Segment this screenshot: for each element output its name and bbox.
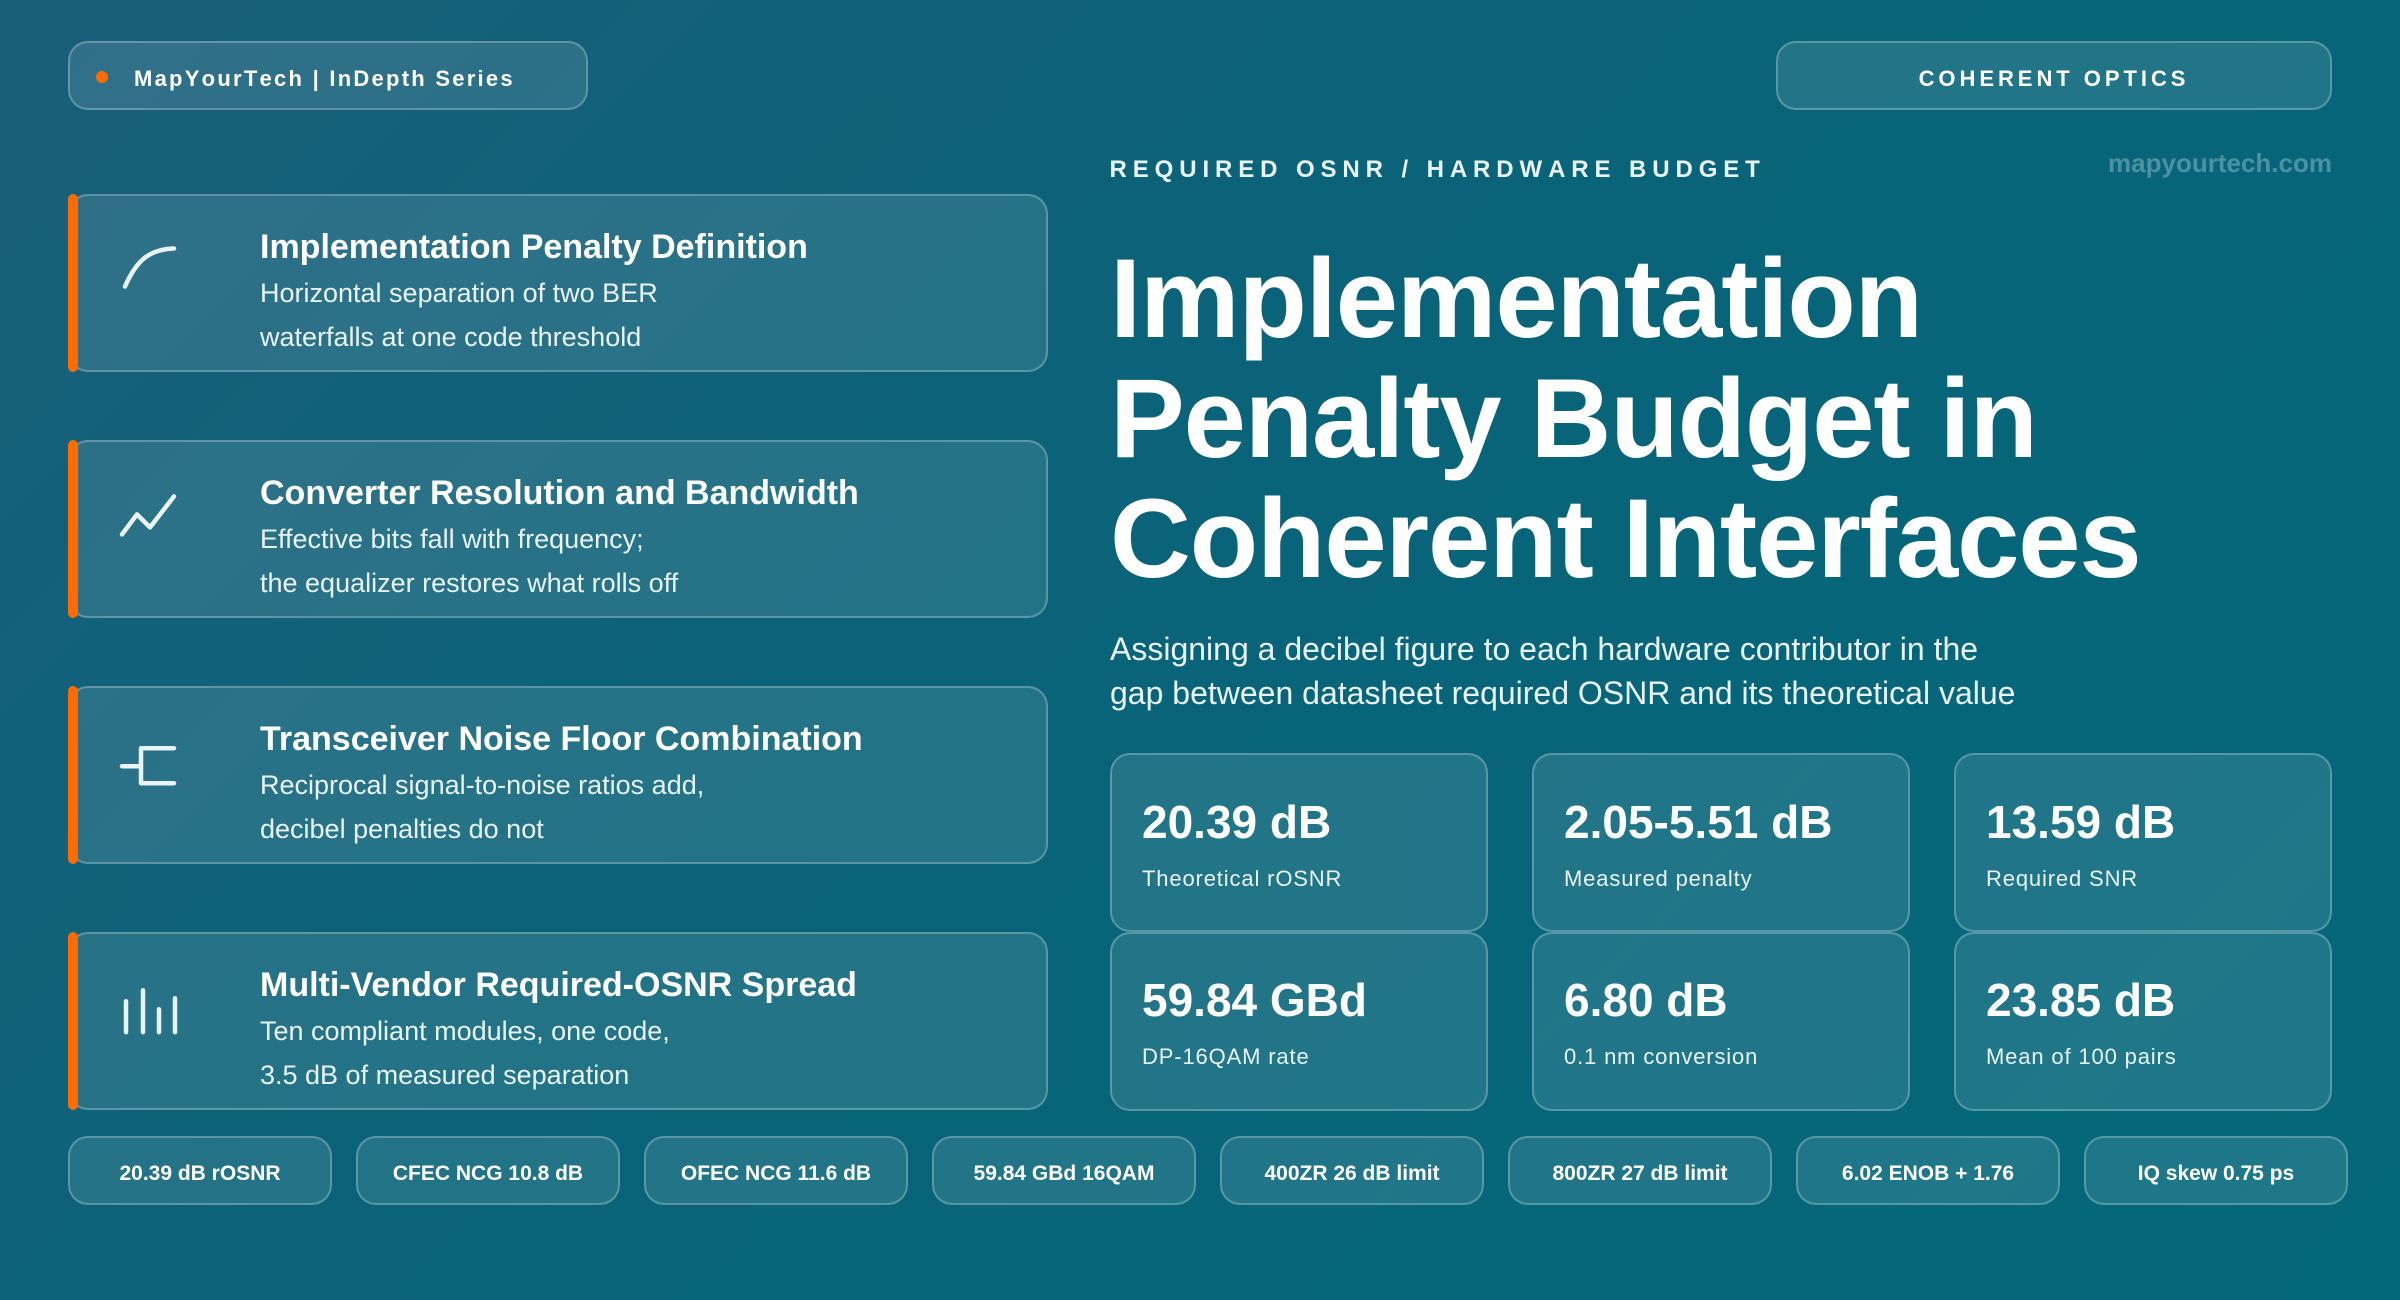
accent bar	[68, 686, 78, 864]
stat value: 13.59 dB	[1986, 796, 2175, 848]
subtitle: Assigning a decibel figure to each hardware contributor in the	[1110, 631, 1978, 667]
chip: rOSNR	[68, 1136, 332, 1204]
card description: Effective bits fall with frequency;	[260, 524, 644, 554]
stat label: Theoretical rOSNR	[1142, 866, 1342, 890]
card description: the equalizer restores what rolls off	[260, 568, 678, 598]
stat value: 59.84 GBd	[1142, 974, 1367, 1026]
stat label: 0.1 nm conversion	[1564, 1044, 1758, 1069]
card description: 3.5 dB of measured separation	[260, 1060, 629, 1090]
card heading: Transceiver Noise Floor Combination	[260, 720, 863, 758]
chip: 800ZR limit: 800ZR 27 dB limit	[1552, 1162, 1728, 1184]
panel: converter resolution and bandwidth	[68, 440, 1048, 618]
accent bar	[68, 440, 78, 618]
header badge: topic	[1776, 41, 2332, 110]
chip: ENOB formula	[1796, 1136, 2060, 1204]
card heading: Implementation Penalty Definition	[260, 228, 808, 266]
chip: OFEC NCG: OFEC NCG 11.6 dB	[681, 1162, 871, 1184]
subtitle: gap between datasheet required OSNR and its theoretical value	[1110, 675, 2015, 711]
chip: CFEC NCG: CFEC NCG 10.8 dB	[393, 1162, 583, 1184]
stat: required SNR	[1954, 753, 2332, 932]
stat label: Mean of 100 pairs	[1986, 1044, 2177, 1069]
card description: decibel penalties do not	[260, 814, 544, 844]
accent bar	[68, 194, 78, 372]
stat: mean of 100 pairs	[1954, 932, 2332, 1110]
stat value: 20.39 dB	[1142, 796, 1331, 848]
stat label: Required SNR	[1986, 866, 2138, 890]
stat label: DP-16QAM rate	[1142, 1044, 1310, 1069]
topic label: COHERENT OPTICS	[1919, 66, 2189, 91]
stat value: 2.05-5.51 dB	[1564, 796, 1832, 848]
title: Implementation	[1110, 236, 1922, 360]
card description: Reciprocal signal-to-noise ratios add,	[260, 770, 704, 800]
accent bar	[68, 932, 78, 1110]
card description: waterfalls at one code threshold	[260, 322, 641, 352]
website watermark: mapyourtech.com	[2108, 148, 2332, 178]
title	[1110, 236, 2141, 600]
eyebrow heading: REQUIRED OSNR / HARDWARE BUDGET	[1110, 156, 1766, 183]
icon: zigzag trend line	[120, 494, 176, 537]
panel: implementation penalty definition	[68, 194, 1048, 372]
stat: DP-16QAM rate	[1110, 932, 1488, 1110]
chip: 800ZR limit	[1508, 1136, 1772, 1204]
title: Coherent Interfaces	[1110, 476, 2141, 600]
stat label: Measured penalty	[1564, 866, 1752, 890]
chip: IQ skew: IQ skew 0.75 ps	[2138, 1162, 2294, 1184]
card description: Ten compliant modules, one code,	[260, 1016, 670, 1046]
chip: rOSNR: 20.39 dB rOSNR	[119, 1162, 281, 1184]
stat: theoretical rOSNR	[1110, 753, 1488, 932]
icon: orange status dot	[96, 70, 108, 82]
title: Penalty Budget in	[1110, 356, 2037, 480]
icon: vertical bars	[124, 988, 178, 1034]
chip: ENOB formula: 6.02 ENOB + 1.76	[1842, 1162, 2014, 1184]
chip: 400ZR limit	[1220, 1136, 1484, 1204]
chip: 400ZR limit: 400ZR 26 dB limit	[1264, 1162, 1440, 1184]
icon: curve	[122, 246, 176, 289]
card description	[260, 278, 658, 352]
chip: symbol rate	[932, 1136, 1196, 1204]
subtitle	[1110, 631, 2015, 711]
chip: symbol rate: 59.84 GBd 16QAM	[974, 1162, 1154, 1184]
chip: OFEC NCG	[644, 1136, 908, 1204]
panel: transceiver noise floor combination	[68, 686, 1048, 864]
card description	[260, 524, 678, 598]
card heading: Converter Resolution and Bandwidth	[260, 474, 859, 512]
stat: measured penalty	[1532, 753, 1910, 932]
panel: multi-vendor required-OSNR spread	[68, 932, 1048, 1110]
card description: Horizontal separation of two BER	[260, 278, 658, 308]
stat value: 23.85 dB	[1986, 974, 2175, 1026]
series label: MapYourTech | InDepth Series	[134, 66, 515, 91]
card description	[260, 770, 704, 844]
chip: IQ skew	[2084, 1136, 2348, 1204]
stat: 0.1 nm conversion	[1532, 932, 1910, 1110]
card description	[260, 1016, 670, 1090]
chip: CFEC NCG	[356, 1136, 620, 1204]
card heading: Multi-Vendor Required-OSNR Spread	[260, 966, 857, 1004]
icon: combiner bracket	[120, 746, 176, 786]
stat value: 6.80 dB	[1564, 974, 1728, 1026]
header badge: series	[68, 41, 588, 110]
